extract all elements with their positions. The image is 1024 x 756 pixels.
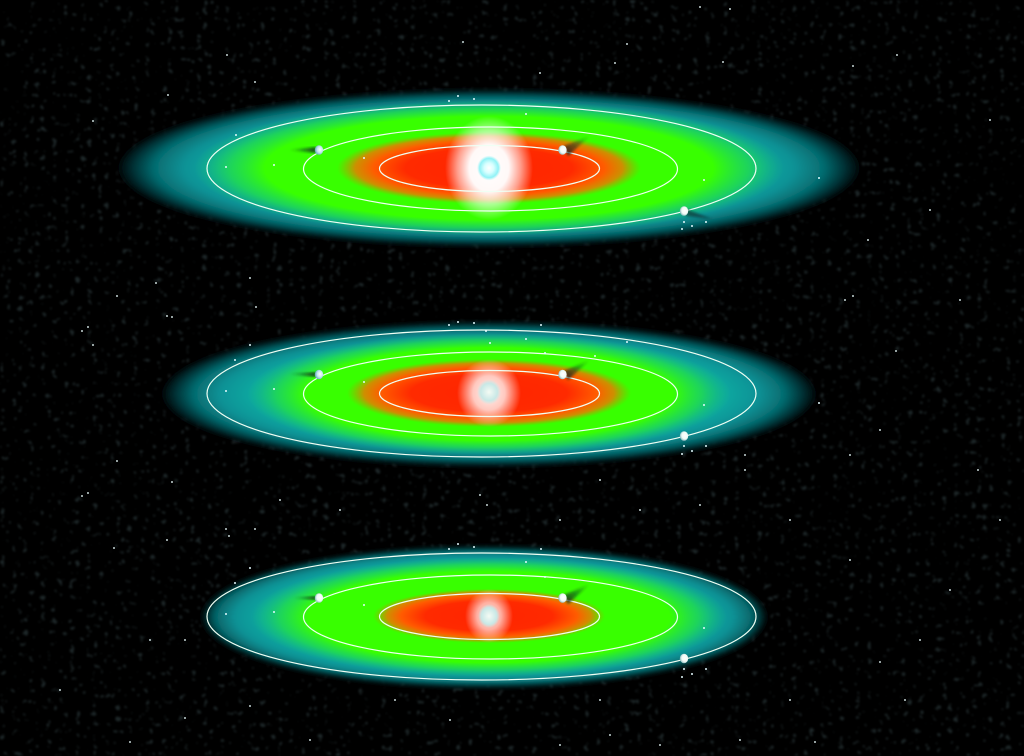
disc 1: widest habitable zone [117, 90, 861, 246]
disc 2 stellar heat core [457, 359, 521, 427]
disc 2 star [477, 380, 501, 404]
disc 3 teal outer glow [201, 547, 767, 687]
disc 2 orbits [207, 330, 756, 457]
disc 3 planets with shadows [292, 584, 688, 663]
disc 3 stars over the disc [226, 544, 706, 677]
disc 1 teal outer glow [117, 90, 861, 246]
disc 2 green zone [247, 333, 731, 455]
disc 1 red zone [337, 132, 641, 204]
disc 1 stars over the disc [226, 96, 819, 229]
disc 1 orbits [207, 105, 756, 232]
disc 1 planets with shadows [288, 136, 712, 219]
disc 2 stars over the disc [226, 322, 819, 454]
disc 1 green zone [194, 100, 784, 236]
disc 2 red zone [347, 359, 631, 427]
disc 3 orbits [207, 553, 756, 680]
disc 1 stellar heat core [445, 116, 533, 220]
disc 2 teal outer glow [161, 322, 817, 466]
disc 3 green zone [251, 557, 727, 677]
disc 3 red zone [373, 589, 605, 643]
disc 2: medium habitable zone [161, 322, 819, 466]
disc 3: narrowest habitable zone [201, 544, 767, 687]
disc 2 planets with shadows [288, 360, 688, 441]
disc 3 star [478, 604, 500, 628]
disc 1 star [477, 156, 501, 180]
disc 3 stellar heat core [465, 589, 513, 643]
